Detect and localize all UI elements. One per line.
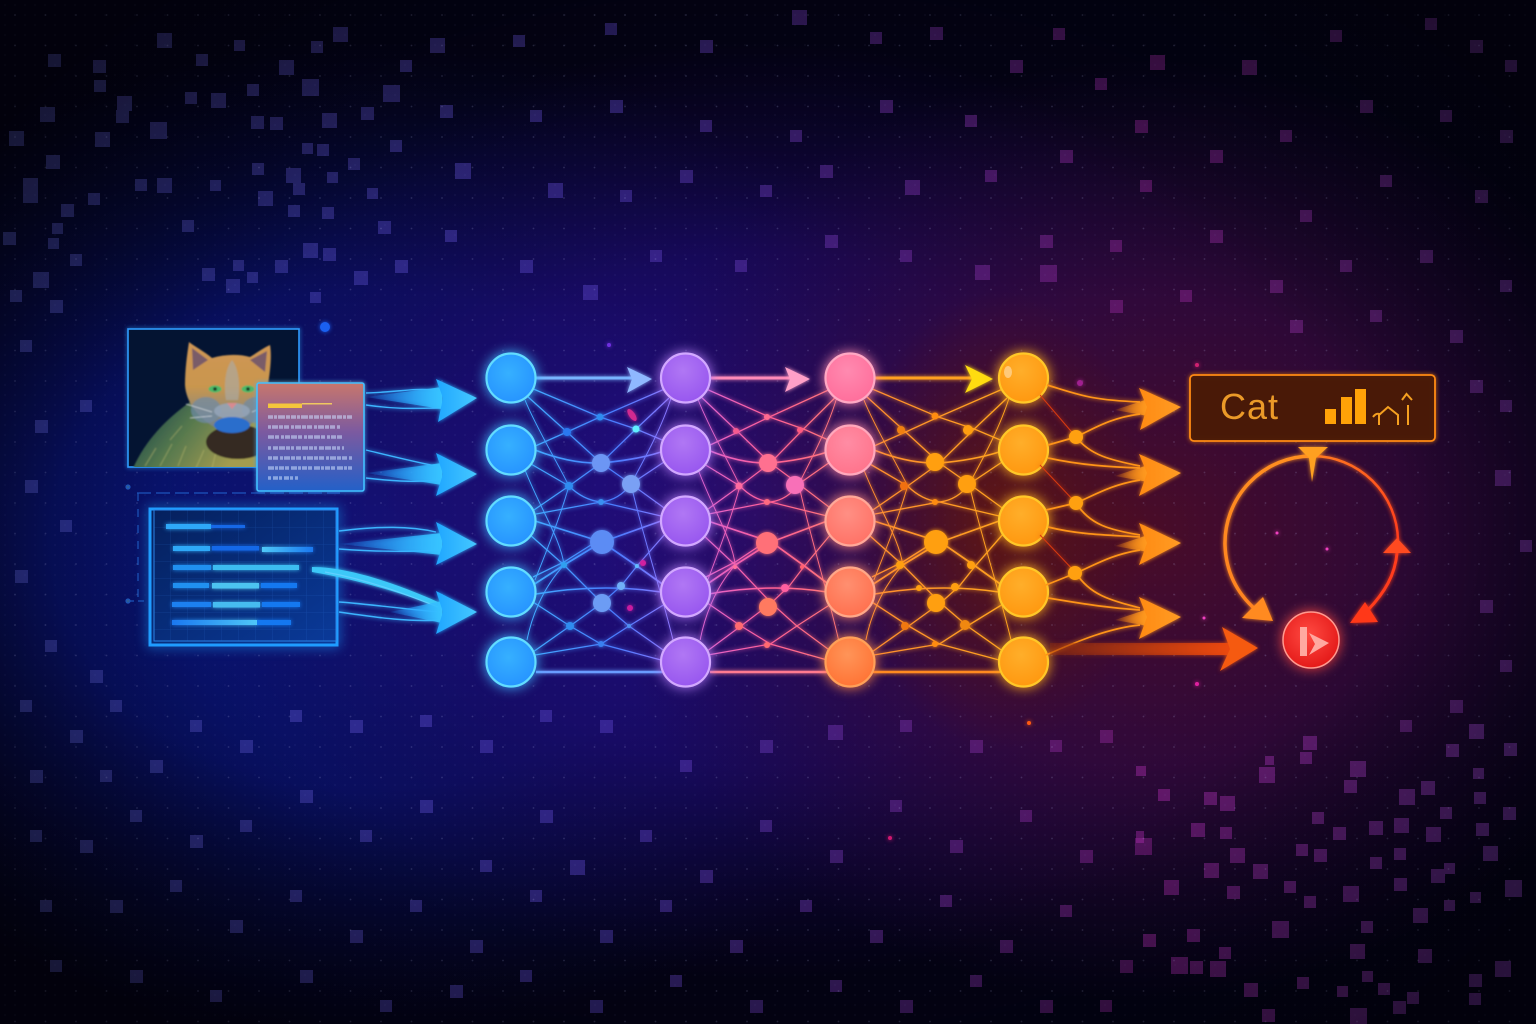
top and bottom layer rails — [536, 378, 1000, 672]
layer 1: input nodes — [486, 354, 536, 686]
icon: cat illustration — [133, 342, 271, 468]
arrowhead: lower right — [1350, 602, 1378, 623]
layer 4: amber nodes — [999, 354, 1048, 686]
arc: left — [1225, 456, 1311, 610]
dot beside the cat panel — [320, 322, 330, 332]
arrow: layer 2 to layer 3 — [785, 367, 810, 392]
arrow: input 4 — [312, 567, 477, 634]
hidden units between layers 2 and 3 — [733, 414, 804, 648]
arrow: input 1 — [366, 379, 477, 422]
input panel: cat photo — [128, 329, 299, 468]
yellow heading bar — [268, 403, 332, 408]
connections: input to hidden layer 1 — [525, 388, 673, 660]
arrow: output 1 — [1115, 388, 1181, 430]
arrow: output 2 — [1115, 454, 1181, 496]
icon: bar chart — [1325, 389, 1366, 424]
icon: line chart — [1373, 394, 1412, 425]
hidden units between layers 3 and 4 — [896, 412, 976, 647]
arrowhead: right — [1383, 538, 1411, 553]
output panel: prediction label — [1190, 375, 1435, 441]
action button — [1283, 612, 1339, 668]
input card: document — [257, 383, 364, 491]
connections: hidden layer 2 to output layer — [864, 388, 1011, 660]
input arrows — [312, 379, 477, 634]
connections: hidden layer 1 to hidden layer 2 — [698, 388, 839, 660]
arrow: layer 1 to layer 2 — [627, 367, 652, 393]
arc: lower right — [1368, 553, 1397, 610]
arc: top right — [1313, 456, 1398, 540]
arrow: layer 3 to layer 4 — [965, 365, 993, 393]
arrowhead: top — [1298, 447, 1328, 482]
arrow: to action button — [1050, 627, 1258, 671]
arrowhead: left — [1242, 597, 1273, 621]
arrow: input 2 — [366, 450, 477, 496]
arrow: output 3 — [1115, 523, 1181, 565]
input panel: data table — [150, 509, 337, 645]
dashed selection frame — [126, 485, 340, 603]
document text lines — [268, 417, 352, 478]
feedback loop — [1225, 447, 1411, 623]
label text: Cat — [1220, 386, 1279, 427]
arrow: input 3 — [339, 522, 477, 565]
layer 2: violet nodes — [661, 354, 710, 686]
arrow: output 4 — [1115, 597, 1181, 639]
layer 3: pink to orange nodes — [826, 354, 874, 686]
table rows — [166, 524, 313, 625]
output hidden units — [1068, 430, 1083, 580]
hidden units between layers 1 and 2 — [561, 414, 640, 647]
icon: play — [1300, 627, 1329, 656]
sparkles — [607, 343, 1328, 840]
output arrows — [1115, 388, 1181, 639]
output connections — [1040, 385, 1140, 655]
